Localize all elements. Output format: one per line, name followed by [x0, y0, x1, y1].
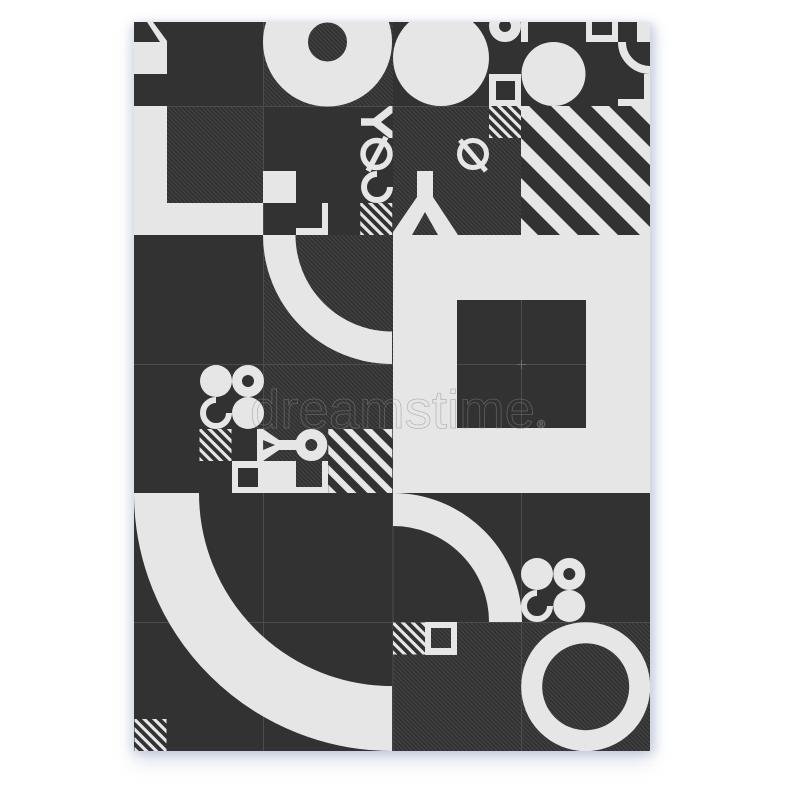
large diagonal stripes — [521, 106, 650, 235]
glyph cluster, lower right — [521, 558, 585, 622]
slashed O glyph — [460, 140, 486, 171]
glyph cluster, middle left — [200, 365, 264, 429]
top small ring — [494, 15, 516, 37]
large curved band, bottom left — [166, 493, 392, 718]
curved band, lower right — [393, 510, 506, 622]
glyph: rotated slashed O — [363, 137, 390, 171]
dark block behind Y glyph — [232, 429, 263, 461]
dark poster background — [134, 22, 650, 751]
curved band, upper centre — [279, 235, 392, 348]
poster artwork — [134, 22, 650, 751]
large Y glyph — [393, 171, 458, 235]
square outline icon — [489, 74, 521, 106]
hatched cells — [167, 22, 650, 751]
small light square — [263, 171, 296, 203]
small stripe square — [360, 203, 392, 235]
square outline, lower centre — [425, 622, 457, 655]
stripe square, bottom left — [134, 719, 166, 751]
top large circle — [393, 22, 489, 106]
glyph: rotated Y — [361, 107, 394, 137]
stripe square, top centre — [489, 106, 521, 138]
large L shape — [134, 106, 263, 235]
stripe square, lower centre — [393, 622, 425, 654]
glyph: open C — [364, 174, 390, 200]
top-left square with diagonal — [134, 22, 167, 74]
stripes, middle — [328, 429, 392, 493]
watermark text: ® — [537, 419, 545, 431]
thin L corner — [296, 203, 328, 235]
top large ring — [286, 0, 370, 84]
rotated Y and ring — [257, 429, 322, 461]
stripe square, middle left — [200, 429, 232, 461]
watermark text: dreamstime — [250, 380, 535, 440]
square outline block — [232, 461, 328, 493]
rotated glyph column — [361, 107, 394, 200]
top-right glyph cluster — [521, 22, 650, 106]
poster sheet shadow — [134, 22, 650, 751]
large ring, bottom right — [532, 633, 640, 741]
big square frame — [393, 235, 650, 493]
centre crosshair — [517, 360, 526, 369]
